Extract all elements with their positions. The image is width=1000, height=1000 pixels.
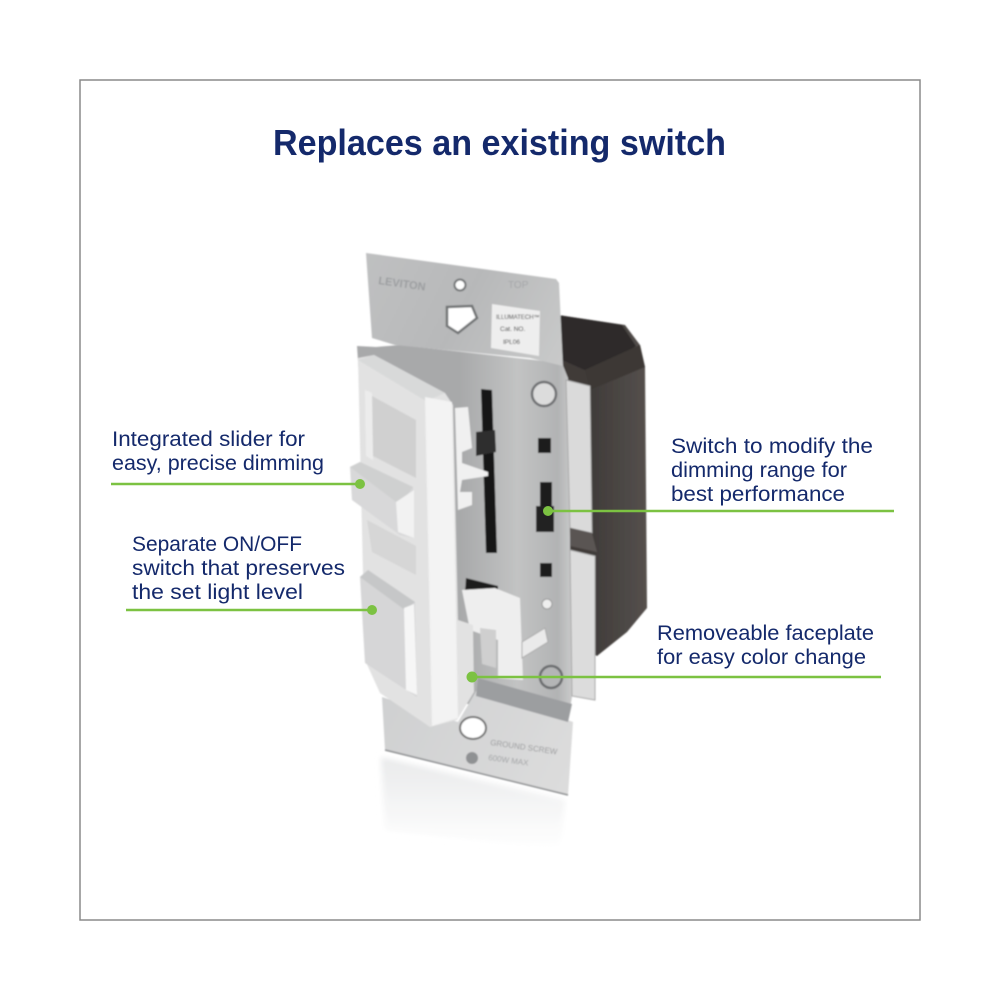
screws [532, 382, 562, 688]
top mounting tab: TOP [508, 280, 529, 291]
range switch slots [536, 438, 554, 577]
on/off button [360, 570, 417, 697]
catalog label [491, 304, 540, 356]
bottom mounting tab: GROUND SCREW [490, 738, 558, 756]
main metal strap [357, 345, 572, 720]
right flange [566, 380, 597, 700]
callout: removable faceplate [466, 622, 881, 682]
catalog label: ILLUMATECH™ [496, 314, 540, 321]
callout: removable faceplate: Removeable faceplate [657, 622, 874, 645]
bottom mounting tab: 600W MAX [488, 753, 530, 768]
callout: removable faceplate: for easy color change [657, 646, 866, 669]
callout: on/off switch: Separate ON/OFF [132, 533, 302, 556]
plate reflection [381, 757, 565, 850]
dimmer switch product illustration [350, 253, 647, 850]
title: Replaces an existing switch [273, 122, 726, 163]
slider knob [350, 462, 414, 538]
callout: range switch: Switch to modify the [671, 435, 873, 458]
callout: slider: Integrated slider for [112, 428, 305, 451]
callout: slider: easy, precise dimming [112, 452, 324, 475]
callout: on/off switch [126, 533, 377, 615]
faceplate body [358, 355, 474, 727]
slider track [465, 389, 498, 600]
catalog label: Cat. NO. [500, 326, 525, 333]
faceplate clips [455, 407, 548, 680]
callout: on/off switch: the set light level [132, 581, 303, 604]
callout: range switch [543, 435, 894, 516]
callout: slider [111, 428, 365, 489]
bottom mounting tab [382, 678, 573, 795]
callout: range switch: best performance [671, 483, 845, 506]
top mounting tab [366, 253, 563, 366]
top mounting tab: LEVITON [378, 275, 426, 294]
callout: range switch: dimming range for [671, 459, 847, 482]
catalog label: IPL06 [503, 339, 520, 346]
frame border [80, 80, 920, 920]
callout: on/off switch: switch that preserves [132, 557, 345, 580]
dark rear housing [558, 315, 647, 656]
